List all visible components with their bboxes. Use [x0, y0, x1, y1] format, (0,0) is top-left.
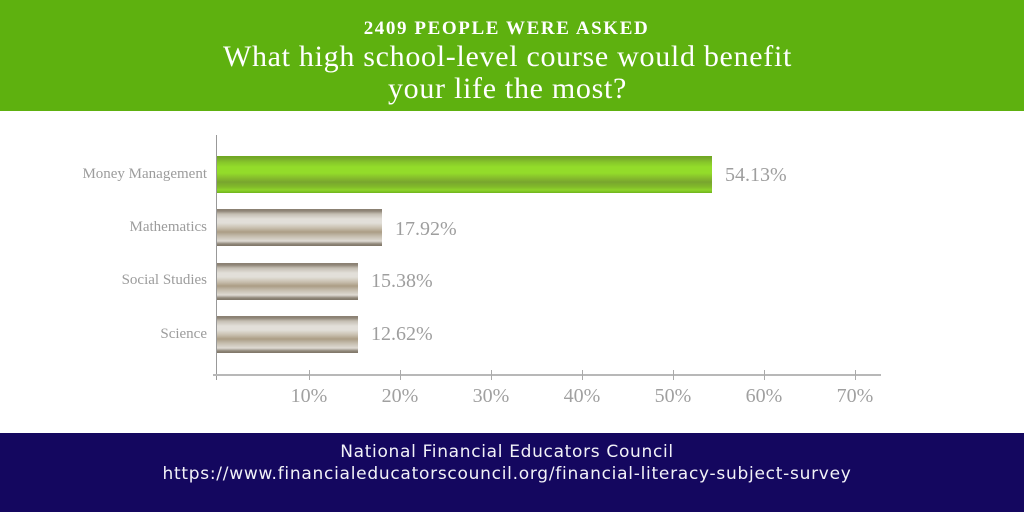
- survey sample heading: 2409 PEOPLE WERE ASKED: [364, 18, 649, 39]
- value: 54.13%: 54.13%: [725, 164, 787, 186]
- axis label: 20%: 20%: [382, 385, 418, 407]
- source organization: National Financial Educators Council: [340, 442, 674, 462]
- value: 17.92%: 17.92%: [395, 218, 457, 240]
- source URL: https://www.financialeducatorscouncil.org/financial-literacy-subject-survey: [162, 464, 852, 484]
- axis label: 40%: 40%: [564, 385, 600, 407]
- bar: Mathematics: [217, 209, 382, 246]
- value: 12.62%: 12.62%: [371, 323, 433, 345]
- header band: [0, 0, 1024, 111]
- label: Money Management: Money Management: [82, 166, 207, 182]
- axis label: 70%: 70%: [837, 385, 873, 407]
- label: Mathematics: Mathematics: [130, 219, 207, 235]
- survey question title: [223, 40, 792, 105]
- bar: Science: [217, 316, 358, 353]
- survey question title: your life the most?: [388, 72, 627, 105]
- value: 15.38%: 15.38%: [371, 270, 433, 292]
- axis label: 50%: 50%: [655, 385, 691, 407]
- axis label: 60%: 60%: [746, 385, 782, 407]
- label: Science: Science: [160, 326, 207, 342]
- bar: Money Management: [217, 156, 712, 193]
- axis label: 30%: 30%: [473, 385, 509, 407]
- bar chart: [82, 135, 881, 407]
- survey question title: What high school-level course would benefit: [223, 40, 792, 73]
- label: Social Studies: Social Studies: [122, 272, 207, 288]
- bar: Social Studies: [217, 263, 358, 300]
- axis label: 10%: 10%: [291, 385, 327, 407]
- footer band: [0, 433, 1024, 512]
